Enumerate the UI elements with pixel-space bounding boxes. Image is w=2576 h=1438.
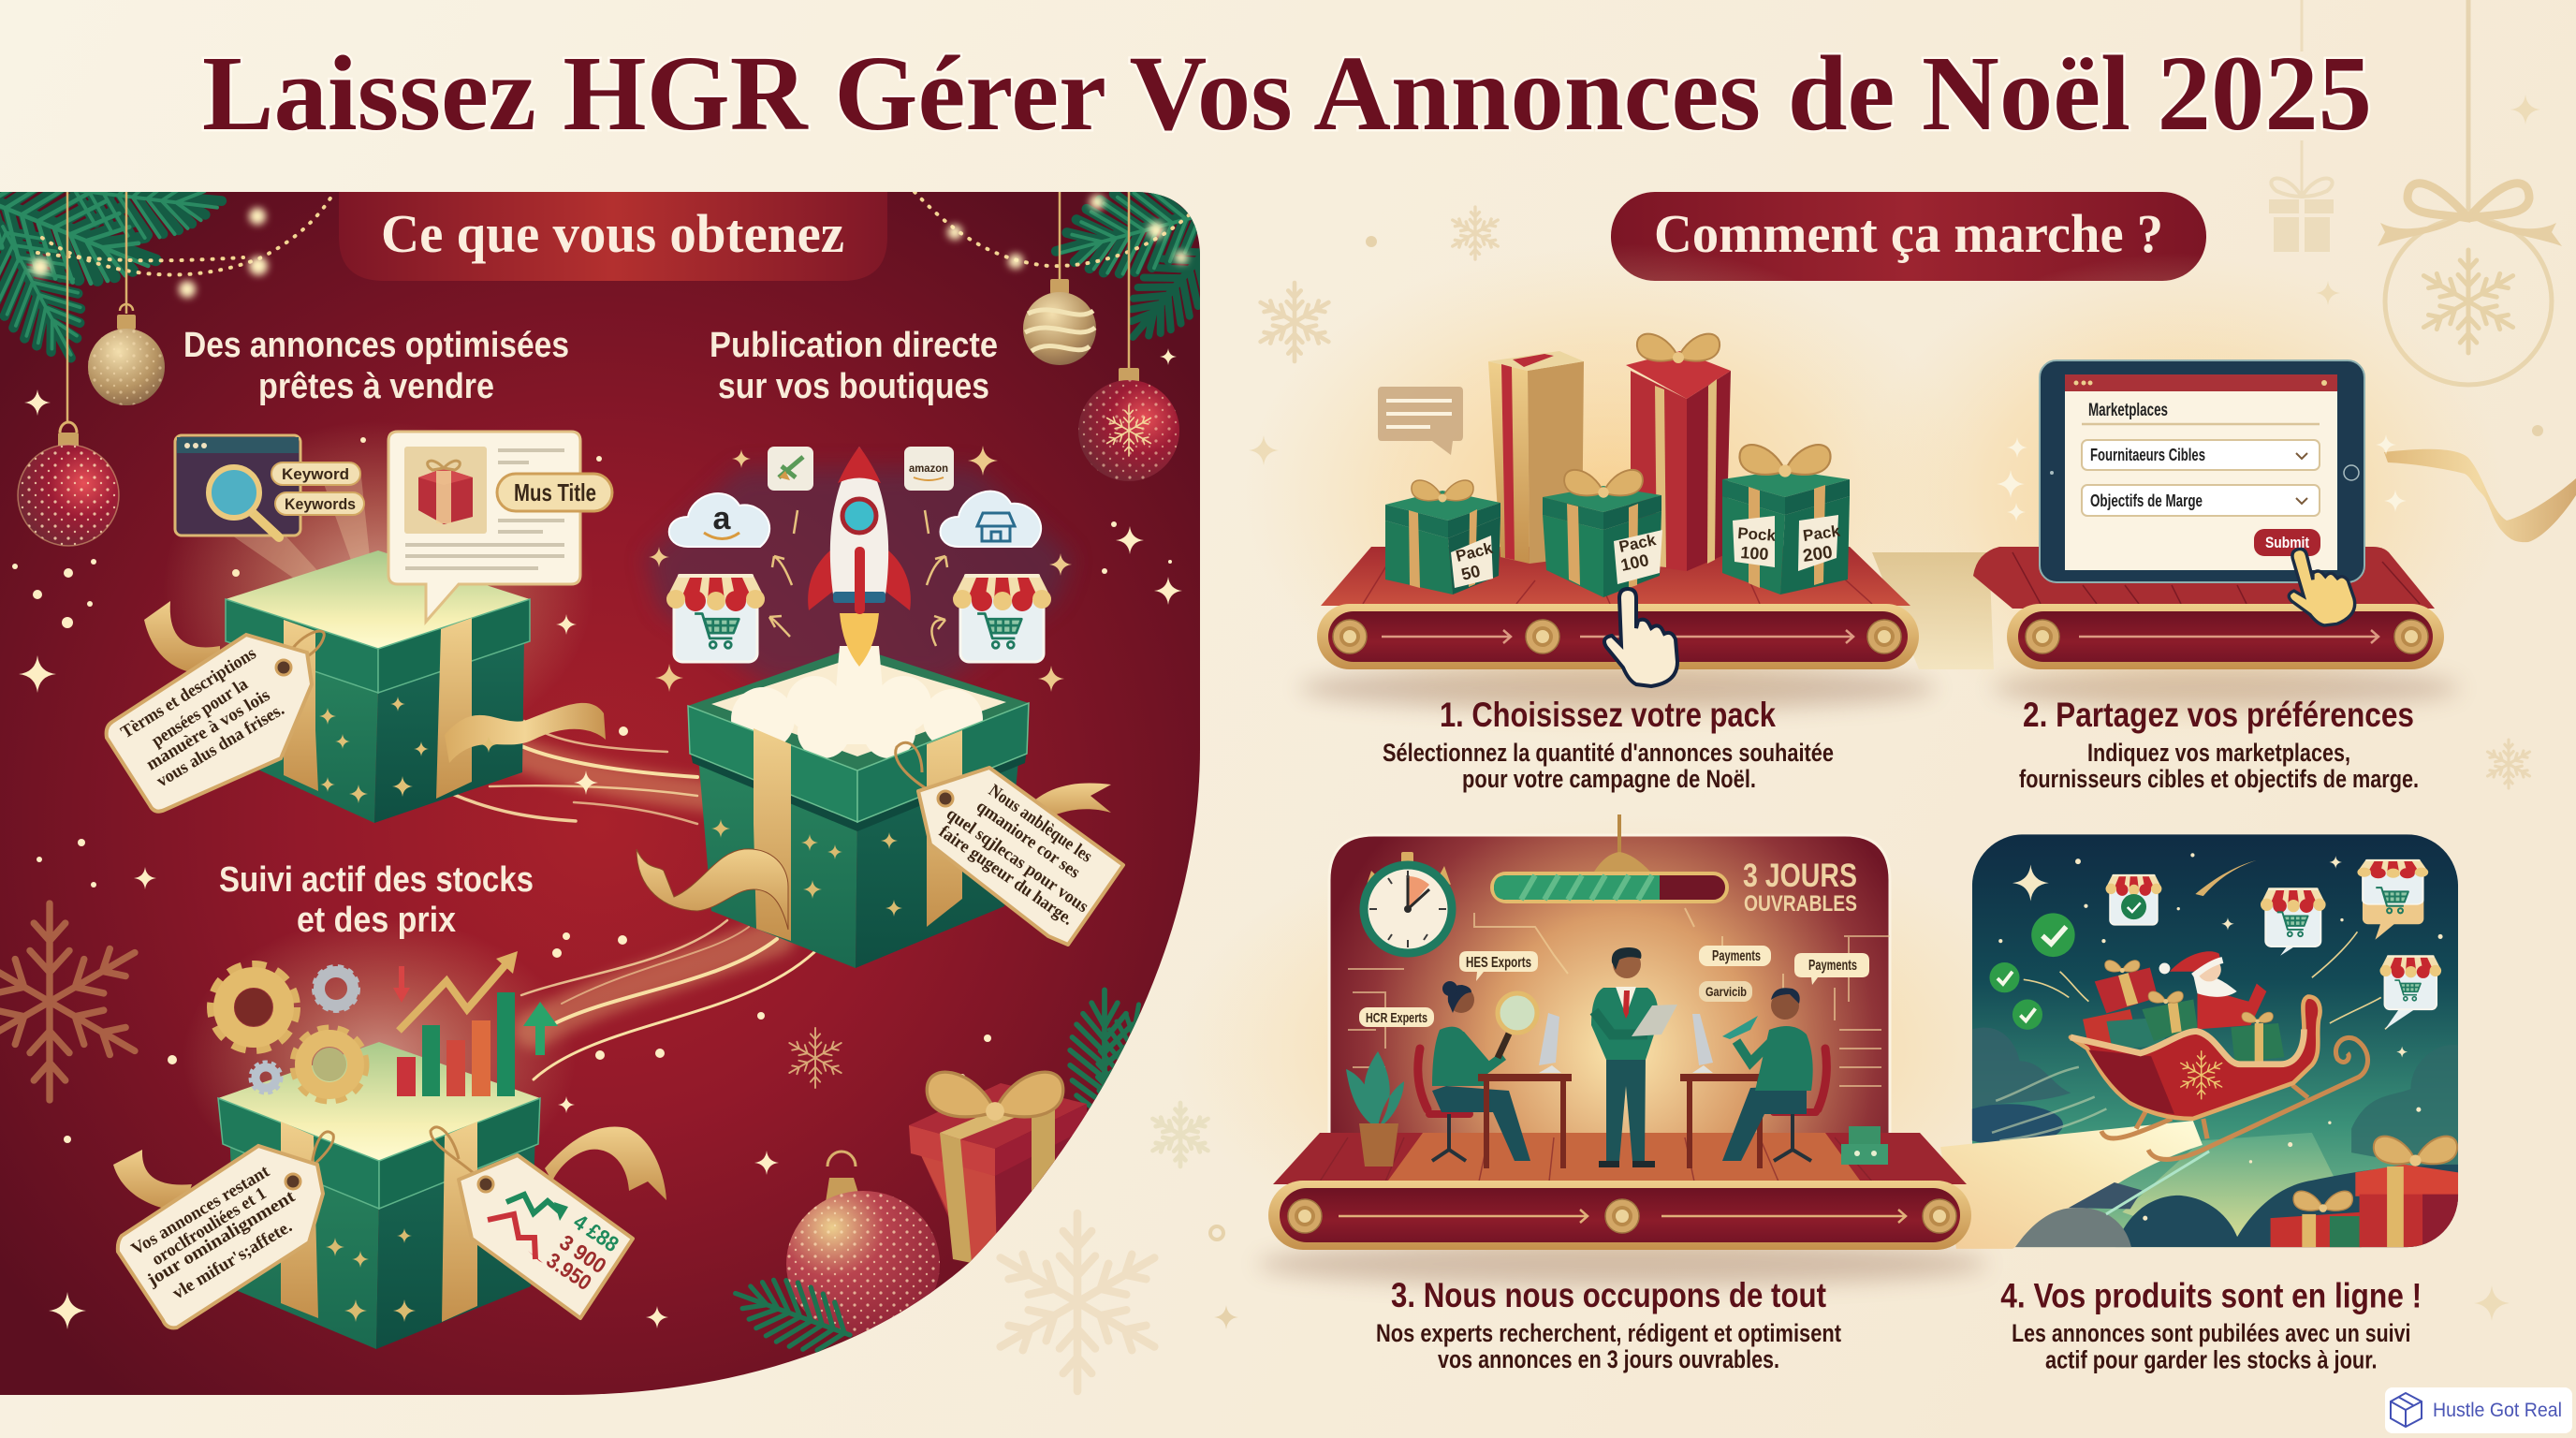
box 3 interior: [218, 1042, 540, 1161]
chat bubble: [1378, 387, 1463, 455]
left worker: [1418, 981, 1537, 1161]
dark haze: [646, 468, 1072, 683]
decorative cream motifs, right side: [991, 0, 2562, 1391]
price tag 3: jour ominalignment: [143, 1186, 300, 1291]
step 2: share preferences: [1973, 360, 2444, 793]
small cards: [768, 447, 954, 491]
price tag 4: 3.950: [542, 1248, 596, 1295]
plant: [1346, 1051, 1404, 1167]
gift: pack 100 / 200: Pock: [1737, 524, 1777, 545]
box 1 interior: [226, 550, 530, 649]
title: Laissez HGR Gérer Vos Annonces de Noël 2025: [202, 34, 2372, 153]
step 3 caption: 3. Nous nous occupons de tout: [1391, 1276, 1826, 1314]
gift: pack 50: 50: [1459, 562, 1482, 584]
gift: pack 100 / 200: Pack: [1802, 522, 1841, 545]
gift: tall red: [1626, 334, 1731, 571]
conveyor 3: [1268, 1133, 1971, 1250]
step 3 caption: Nos experts recherchent, rédigent et optimisent: [1376, 1319, 1841, 1347]
cloud: store: [940, 492, 1041, 547]
tablet form: Marketplaces: [2088, 401, 2168, 420]
price tag 1: vous alus dna frises.: [154, 699, 287, 791]
heading: publication directe: Publication directe: [710, 326, 998, 365]
bar chart with arrows: [393, 951, 558, 1096]
price tag 4: [431, 1127, 633, 1318]
gift: tall gold: [1488, 351, 1584, 564]
pill: ce que vous obtenez: [339, 192, 887, 281]
ornament: gold striped: [1023, 279, 1096, 365]
ribbons: [113, 1150, 192, 1212]
keyword pills: [271, 462, 364, 515]
pill: comment ça marche: Comment ça marche ?: [1654, 203, 2163, 264]
pine branches, top: [0, 147, 1231, 376]
watermark text: Hustle Got Real: [2433, 1400, 2562, 1421]
comet marks: [2195, 860, 2257, 896]
gift: pack 100: [1543, 470, 1662, 597]
price tag 1: [107, 631, 324, 812]
santa: [2197, 984, 2266, 1029]
icon: search window: [175, 435, 300, 537]
gift: pack 100: 100: [1619, 550, 1650, 575]
price tag 3: Vos annonces restant: [128, 1161, 273, 1259]
small snowflake: [786, 1028, 844, 1088]
speech bubbles: [1359, 946, 1869, 1027]
grey hill and dark patch: [2015, 1152, 2209, 1247]
step 2 caption: fournisseurs cibles et objectifs de marge.: [2019, 765, 2419, 793]
heading: publication directe: sur vos boutiques: [718, 367, 989, 406]
price tag 1: Tèrms et descriptions: [118, 643, 259, 742]
listing card: Mus Title: [514, 478, 596, 506]
pill: comment ça marche: [1611, 192, 2206, 281]
gift box 3 with gears and chart: [113, 917, 666, 1349]
ornament: red right: [1078, 368, 1179, 481]
step 2 caption: [2019, 696, 2419, 793]
ribbon left: [144, 601, 220, 674]
heading: suivi actif: et des prix: [297, 901, 456, 940]
sleigh body: [2071, 997, 2320, 1119]
step 1: choose pack: [1317, 334, 1919, 793]
step 1 caption: Sélectionnez la quantité d'annonces souhaitée: [1383, 739, 1834, 767]
heading: suivi actif: Suivi actif des stocks: [219, 860, 534, 900]
panel: ce que vous obtenez: [0, 147, 1231, 1411]
3 jours ouvrables: [1743, 858, 1857, 917]
heading: annonces optimisées: Des annonces optimisées: [183, 326, 569, 365]
gift box 2 with rocket: [637, 446, 1123, 968]
price tag 2: faire gugeur du harge.: [935, 822, 1076, 930]
speech bubbles: Garvicib: [1705, 984, 1747, 999]
ornament strings: [67, 192, 1129, 421]
gifts in corner: [2271, 1137, 2458, 1248]
box 3 faces: [229, 1128, 379, 1349]
warm glows behind steps: [1173, 243, 2509, 1286]
golden streaks: [452, 721, 814, 1079]
keyword pills: Keywords: [285, 495, 356, 513]
step 1 caption: 1. Choisissez votre pack: [1440, 696, 1776, 734]
conveyor 2: [1973, 547, 2444, 669]
step 3: we handle it: [1268, 814, 1971, 1373]
rocket exhaust and smoke: [731, 646, 983, 758]
ribbon, step 2 right: [2384, 449, 2576, 542]
right desk: [1680, 1014, 1774, 1168]
money box: [1841, 1126, 1888, 1165]
gift: pack 100 / 200: [1722, 445, 1850, 594]
heading: annonces optimisées: [183, 326, 569, 406]
ribbon: [637, 849, 788, 930]
rocket: [808, 447, 911, 667]
heading: suivi actif: [219, 860, 534, 940]
light trail: [1940, 1121, 2203, 1249]
price tag 1: pensées pour la: [148, 674, 252, 751]
step 4: sleigh scene: [1940, 834, 2458, 1374]
price tag 3: oroclfrouliées et 1: [149, 1183, 270, 1269]
tablet form: [2040, 360, 2364, 582]
step 3 caption: [1376, 1276, 1841, 1373]
shop bubbles: [2106, 859, 2441, 1029]
arrows and sparkles: [769, 510, 947, 646]
watermark badge: [2385, 1387, 2572, 1433]
big faint snowflake: [0, 903, 144, 1100]
lamp: [1594, 814, 1650, 872]
gifts in sleigh: [2083, 961, 2284, 1064]
price tag 2: quel sqjlecas pour vous: [943, 804, 1092, 917]
cloud: amazon: [669, 493, 769, 547]
speech bubbles: HES Exports: [1466, 955, 1531, 971]
price tag 3: vle mifur's;affete.: [169, 1217, 296, 1303]
price tag 1: manuère à vos lois: [143, 685, 273, 774]
connector band between step 1 and 2: [1872, 552, 1994, 669]
gift box 1 with icons: [107, 421, 612, 823]
listing card: [388, 432, 612, 622]
garland lights: [37, 192, 1193, 274]
pine bottom: [724, 990, 1168, 1365]
ornament: gold left: [88, 304, 165, 405]
speech bubbles: Payments: [1808, 958, 1857, 974]
pill: ce que vous obtenez: Ce que vous obtenez: [381, 203, 844, 264]
small cards: amazon: [909, 462, 948, 475]
tablet form: Fournitaeurs Cibles: [2090, 446, 2205, 464]
conveyor 1: [1317, 547, 1919, 669]
icon: cube: [2391, 1393, 2422, 1427]
step 1 caption: pour votre campagne de Noël.: [1462, 765, 1756, 793]
box 1 faces: [234, 637, 378, 823]
speech bubbles: HCR Experts: [1366, 1010, 1427, 1026]
cloud: amazon: a: [713, 501, 732, 536]
heading: annonces optimisées: prêtes à vendre: [258, 367, 494, 406]
step 2 caption: Indiquez vos marketplaces,: [2087, 739, 2350, 767]
price tag 3: [118, 1132, 333, 1328]
gift: pack 50: [1385, 480, 1500, 594]
step 1 caption: [1383, 696, 1834, 793]
step 4 caption: Les annonces sont pubilées avec un suivi: [2012, 1318, 2410, 1347]
standing expert: [1591, 947, 1677, 1167]
3 jours ouvrables: 3 JOURS: [1743, 858, 1857, 894]
stars: [1998, 853, 2443, 1221]
tablet form: Objectifs de Marge: [2090, 492, 2203, 510]
step 2 caption: 2. Partagez vos préférences: [2023, 696, 2414, 734]
faint circuit lines: [1348, 908, 1890, 1086]
step 4 caption: actif pour garder les stocks à jour.: [2045, 1345, 2378, 1374]
tablet form: Submit: [2265, 534, 2309, 551]
gift: pack 100: Pack: [1617, 531, 1658, 556]
price tag 4: 4 £88: [569, 1210, 623, 1256]
gift bottom right: [909, 1072, 1095, 1273]
backdrop panel: [1329, 835, 1890, 1137]
icon: hand pointer: [1604, 589, 1677, 686]
step 4 caption: [2000, 1277, 2422, 1374]
gift: pack 50: Pack: [1454, 539, 1495, 565]
price tag 2: [896, 742, 1123, 945]
step 3 caption: vos annonces en 3 jours ouvrables.: [1438, 1345, 1779, 1373]
sparkles around tablet: [1997, 434, 2407, 521]
right worker: [1722, 988, 1826, 1161]
price tag 2: Nous anblèque les: [985, 781, 1096, 867]
sleigh with santa: [2071, 951, 2368, 1159]
speech bubbles: Payments: [1712, 948, 1761, 964]
keyword pills: Keyword: [282, 465, 349, 483]
gears: [214, 967, 363, 1098]
box 2 body: [697, 744, 857, 968]
step 4 caption: 4. Vos produits sont en ligne !: [2000, 1277, 2422, 1315]
box 2 interior: [688, 647, 1029, 770]
check badges: [1989, 913, 2075, 1030]
progress bar: [1492, 873, 1727, 902]
clock: [1364, 852, 1452, 953]
sky panel: [1953, 834, 2458, 1252]
gift: pack 100 / 200: 100: [1740, 543, 1769, 564]
price tag 4: 3 900: [555, 1230, 611, 1278]
runners: [2148, 1037, 2368, 1159]
gift: pack 100 / 200: 200: [1802, 543, 1834, 566]
price tag 2: qmaniore cor ses: [973, 797, 1084, 883]
shops: [666, 574, 765, 662]
left desk: [1478, 1013, 1572, 1168]
ornament: red left: [18, 422, 119, 546]
icon: hand on submit: [2278, 539, 2359, 634]
ornament: bottom: [786, 1152, 940, 1337]
heading: publication directe: [710, 326, 998, 406]
sparkles and bokeh: [12, 348, 1182, 1411]
3 jours ouvrables: OUVRABLES: [1744, 891, 1857, 917]
